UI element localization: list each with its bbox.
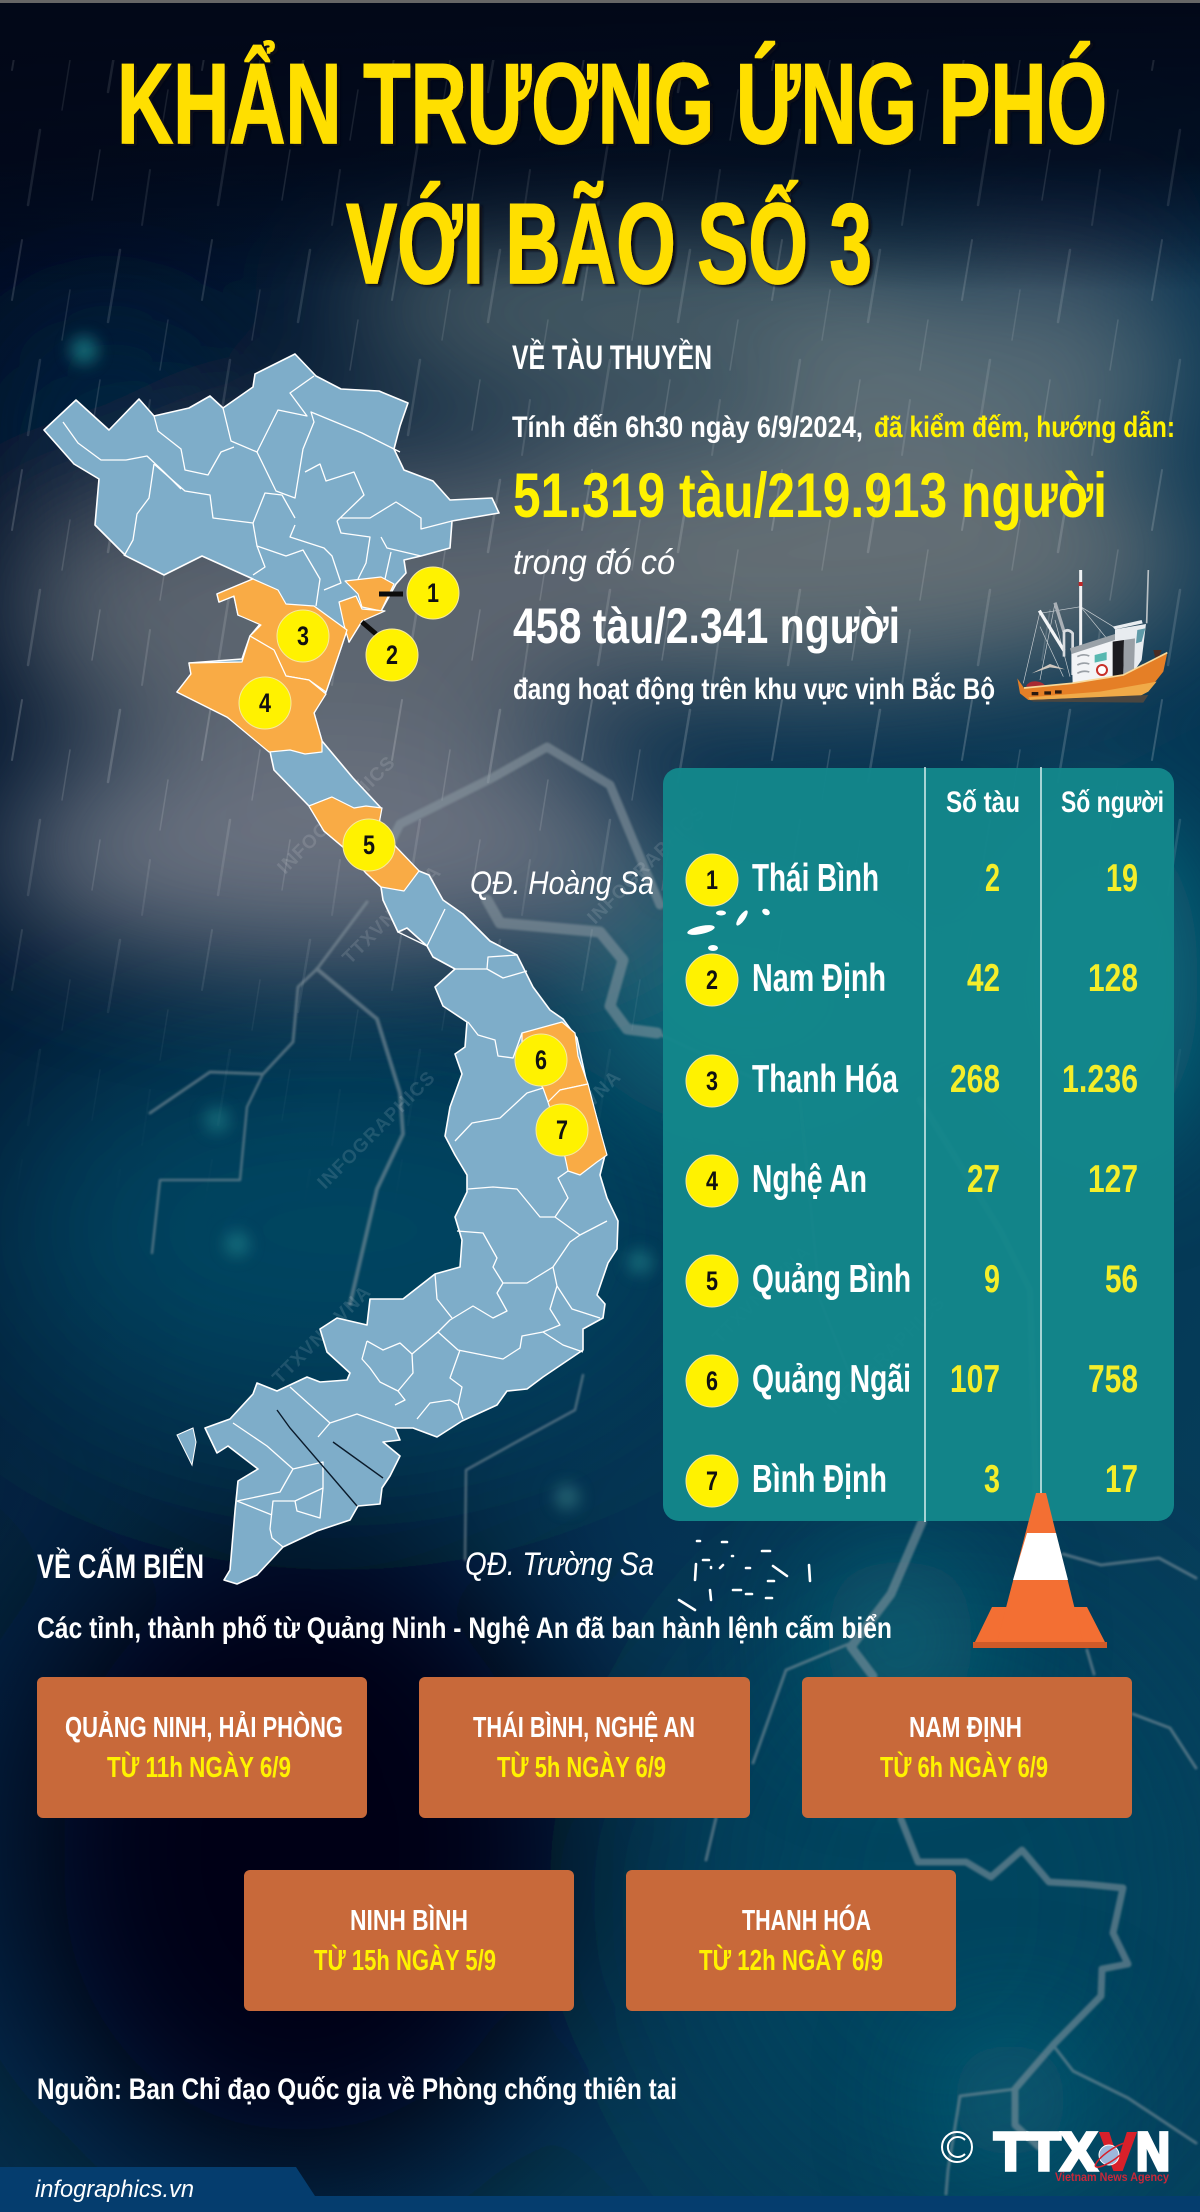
ban box: Thái Bình, Nghệ An: THÁI BÌNH, NGHỆ AN bbox=[473, 1710, 695, 1744]
ban box: Ninh Bình bbox=[244, 1870, 574, 2011]
map markers: 2 bbox=[386, 640, 398, 670]
source note: Nguồn: Ban Chỉ đạo Quốc gia về Phòng chống thiên tai bbox=[37, 2073, 677, 2106]
watermarks bbox=[269, 752, 950, 1419]
row: Nam Định: 2 bbox=[706, 965, 718, 995]
table headers: Số tàu bbox=[946, 786, 1020, 819]
row: Nam Định: 42 bbox=[967, 957, 1000, 1000]
row: Nghệ An: 27 bbox=[967, 1158, 1000, 1201]
row: Quảng Bình: Quảng Bình bbox=[752, 1258, 911, 1301]
ban box: Ninh Bình: TỪ 15h NGÀY 5/9 bbox=[314, 1943, 496, 1977]
row: Thanh Hóa: 268 bbox=[950, 1058, 1000, 1101]
watermarks: TTXVN - VNA bbox=[339, 862, 446, 969]
row: Quảng Bình: 9 bbox=[984, 1258, 1000, 1301]
row: Quảng Ngãi: 107 bbox=[950, 1358, 1000, 1401]
row: Thái Bình: 19 bbox=[1106, 857, 1138, 900]
ban box: Quảng Ninh, Hải Phòng: QUẢNG NINH, HẢI PHÒNG bbox=[65, 1710, 343, 1744]
row: Nghệ An: Nghệ An bbox=[752, 1158, 867, 1201]
ban box: Nam Định: NAM ĐỊNH bbox=[909, 1712, 1022, 1744]
row: Quảng Ngãi bbox=[706, 1358, 1138, 1401]
row: Bình Định bbox=[706, 1458, 1138, 1501]
ban box: Thanh Hóa: THANH HÓA bbox=[742, 1903, 871, 1937]
row: Bình Định: 17 bbox=[1105, 1458, 1138, 1501]
logo: TTXVN: Vietnam News Agency bbox=[1055, 2170, 1169, 2184]
ban box: Quảng Ninh, Hải Phòng: TỪ 11h NGÀY 6/9 bbox=[107, 1750, 291, 1784]
watermarks: INFOGRAPHICS bbox=[824, 1292, 950, 1419]
footer bar: infographics.vn bbox=[35, 2176, 194, 2203]
row: Nam Định: 128 bbox=[1088, 957, 1138, 1000]
row: Quảng Ngãi: 6 bbox=[706, 1366, 718, 1396]
ban box: Quảng Ninh, Hải Phòng bbox=[37, 1677, 367, 1818]
row: Bình Định: 7 bbox=[706, 1466, 718, 1496]
highlighted provinces bbox=[177, 577, 607, 1175]
row: Quảng Bình bbox=[706, 1258, 1138, 1301]
row: Nam Định: Nam Định bbox=[752, 957, 886, 1000]
row: Bình Định: Bình Định bbox=[752, 1458, 887, 1501]
ban box: Nam Định bbox=[802, 1677, 1132, 1818]
icon: traffic cone bbox=[973, 1493, 1107, 1648]
row: Thanh Hóa: 1.236 bbox=[1062, 1058, 1138, 1101]
row: Thanh Hóa: Thanh Hóa bbox=[752, 1058, 898, 1101]
table panel bbox=[663, 767, 1174, 1522]
row: Quảng Ngãi: Quảng Ngãi bbox=[752, 1358, 911, 1401]
row: Thanh Hóa: 3 bbox=[706, 1066, 718, 1096]
map of Vietnam bbox=[44, 354, 618, 1584]
watermarks: INFOGRAPHICS bbox=[274, 752, 400, 879]
row: Thanh Hóa bbox=[706, 1058, 1138, 1101]
section: sea ban heading: Các tỉnh, thành phố từ Quảng Ninh - Nghệ An đã ban hành lệnh cấm biển bbox=[37, 1612, 892, 1645]
section: ships: trong đó có bbox=[513, 543, 675, 582]
map markers: 1 bbox=[427, 578, 439, 608]
watermarks: TTXVN - VNA bbox=[269, 1282, 376, 1389]
row: Quảng Ngãi: 758 bbox=[1088, 1358, 1138, 1401]
row: Thái Bình: Thái Bình bbox=[752, 857, 879, 900]
row: Nam Định bbox=[706, 957, 1138, 1000]
row: Thái Bình: 1 bbox=[706, 865, 718, 895]
row: Bình Định: 3 bbox=[984, 1458, 1000, 1501]
title: VỚI BÃO SỐ 3 bbox=[346, 181, 872, 308]
map markers bbox=[239, 567, 588, 1156]
row markers bbox=[686, 854, 738, 1507]
logo: TTXVN: TTX bbox=[994, 2122, 1097, 2182]
row: Nghệ An: 127 bbox=[1088, 1158, 1138, 1201]
icon: copyright bbox=[942, 2132, 972, 2162]
lightning bolts bbox=[150, 747, 1196, 2194]
footer bar bbox=[0, 2167, 1200, 2212]
row: Nghệ An: 4 bbox=[706, 1166, 718, 1196]
row: Quảng Bình: 56 bbox=[1105, 1258, 1138, 1301]
label: Hoàng Sa: QĐ. Hoàng Sa bbox=[470, 865, 654, 901]
row: Thái Bình: 2 bbox=[985, 857, 1000, 900]
row: Quảng Bình: 5 bbox=[706, 1266, 718, 1296]
section: sea ban heading: VỀ CẤM BIỂN bbox=[37, 1548, 204, 1586]
section: ships: đang hoạt động trên khu vực vịnh Bắc Bộ bbox=[513, 672, 995, 706]
section: ships: 458 tàu/2.341 người bbox=[513, 598, 900, 654]
map markers: 3 bbox=[297, 621, 309, 651]
row: Thái Bình bbox=[706, 857, 1138, 900]
section: sea ban heading bbox=[37, 1548, 892, 1645]
icon: Trường Sa islands bbox=[679, 1541, 810, 1610]
ban box: Thái Bình, Nghệ An bbox=[419, 1677, 750, 1818]
ban box: Ninh Bình: NINH BÌNH bbox=[350, 1903, 468, 1937]
ban box: Thanh Hóa: TỪ 12h NGÀY 6/9 bbox=[699, 1943, 883, 1977]
map markers: 6 bbox=[535, 1045, 547, 1075]
map markers: 7 bbox=[556, 1115, 568, 1145]
logo: TTXVN: V bbox=[1100, 2122, 1136, 2182]
ban box: Thái Bình, Nghệ An: TỪ 5h NGÀY 6/9 bbox=[497, 1750, 666, 1784]
table headers bbox=[946, 786, 1164, 819]
map markers: 5 bbox=[363, 830, 375, 860]
icon: fishing boat bbox=[1017, 570, 1167, 703]
watermarks: INFOGRAPHICS bbox=[314, 1067, 440, 1194]
label: Trường Sa: QĐ. Trường Sa bbox=[465, 1546, 654, 1582]
logo: TTXVN bbox=[942, 2122, 1170, 2184]
logo: TTXVN: N bbox=[1136, 2122, 1170, 2182]
section: ships bbox=[512, 339, 1175, 706]
ban box: Thanh Hóa bbox=[626, 1870, 956, 2011]
title bbox=[117, 41, 1107, 308]
icon: Hoàng Sa islands bbox=[686, 907, 771, 951]
row: Nghệ An bbox=[706, 1158, 1138, 1201]
map markers: 4 bbox=[259, 688, 271, 718]
ban box: Nam Định: TỪ 6h NGÀY 6/9 bbox=[880, 1750, 1048, 1784]
section: ships: VỀ TÀU THUYỀN bbox=[512, 339, 712, 377]
connector lines bbox=[362, 594, 403, 634]
table headers: Số người bbox=[1061, 786, 1164, 819]
section: ships: Tính đến 6h30 ngày 6/9/2024, bbox=[512, 411, 863, 444]
watermarks: TTXVN - VNA bbox=[709, 1242, 816, 1349]
watermarks: TTXVN - VNA bbox=[519, 1067, 626, 1174]
watermarks: INFOGRAPHICS bbox=[584, 802, 710, 929]
